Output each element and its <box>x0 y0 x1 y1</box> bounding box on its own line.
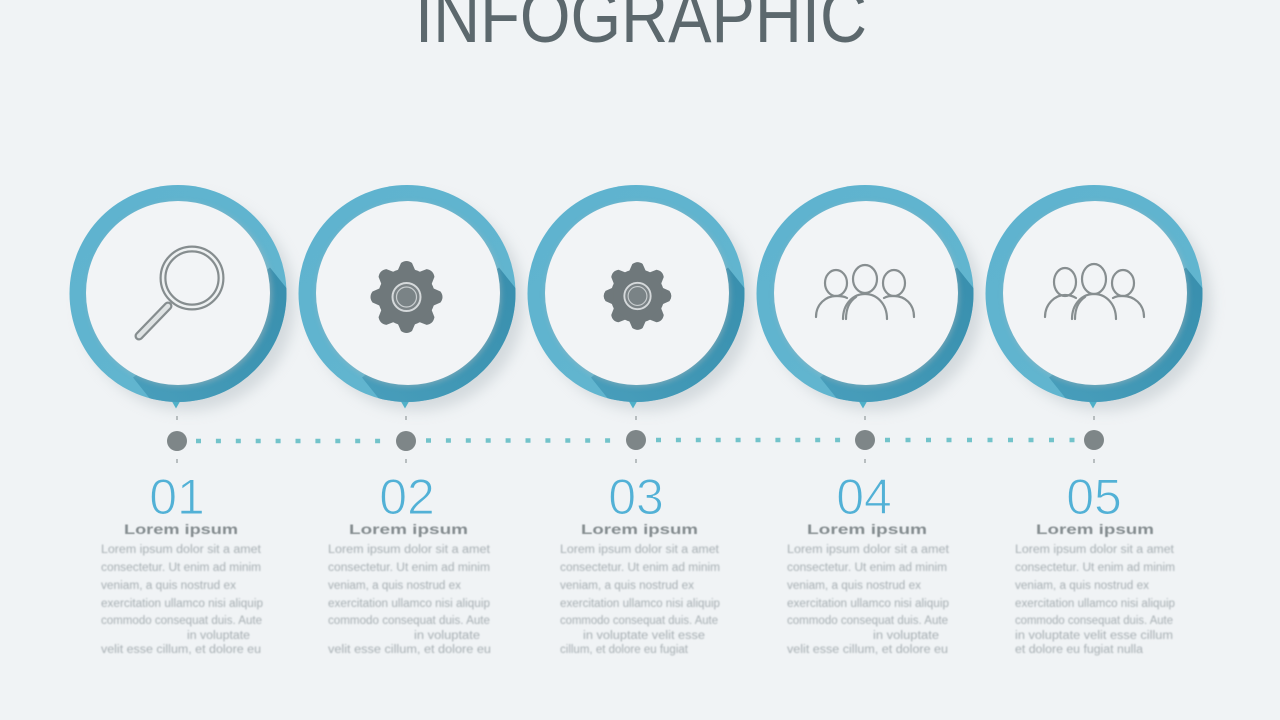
timeline node 2 <box>396 431 416 451</box>
description: consectetur. Ut enim ad minim <box>328 562 490 574</box>
description: exercitation ullamco nisi aliquip <box>1015 598 1175 610</box>
description: Lorem ipsum dolor sit a amet <box>560 544 720 556</box>
description: et dolore eu fugiat nulla <box>1015 644 1144 656</box>
step 1 text <box>101 469 263 656</box>
icon: gear <box>370 261 442 333</box>
subheading: Lorem ipsum <box>124 521 238 537</box>
step 4 badge <box>756 185 986 414</box>
description: veniam, a quis nostrud ex <box>328 580 461 592</box>
description: commodo consequat duis. Aute <box>101 615 262 627</box>
description: in voluptate velit esse cillum <box>1015 630 1173 642</box>
description <box>328 544 491 656</box>
description: Lorem ipsum dolor sit a amet <box>1015 544 1175 556</box>
description: exercitation ullamco nisi aliquip <box>787 598 949 610</box>
description: exercitation ullamco nisi aliquip <box>328 598 490 610</box>
description: veniam, a quis nostrud ex <box>101 580 236 592</box>
step 1 badge <box>70 185 299 414</box>
number 02: 02 <box>379 469 435 525</box>
description: veniam, a quis nostrud ex <box>787 580 921 592</box>
description <box>101 544 263 656</box>
description: commodo consequat duis. Aute <box>787 615 948 627</box>
description: consectetur. Ut enim ad minim <box>1015 562 1175 574</box>
number 01: 01 <box>149 469 205 525</box>
timeline <box>167 416 1104 463</box>
description: in voluptate <box>414 630 480 642</box>
description: veniam, a quis nostrud ex <box>1015 580 1149 592</box>
description: Lorem ipsum dolor sit a amet <box>787 544 950 556</box>
number 05: 05 <box>1066 469 1122 525</box>
step 5 text <box>1015 469 1175 656</box>
description: velit esse cillum, et dolore eu <box>101 644 261 656</box>
description: exercitation ullamco nisi aliquip <box>560 598 720 610</box>
icon: gear <box>604 262 671 330</box>
subheading: Lorem ipsum <box>349 521 468 537</box>
icon: group of people <box>1045 264 1144 319</box>
description: in voluptate <box>873 630 939 642</box>
icon: magnifying glass <box>139 249 221 336</box>
description: commodo consequat duis. Aute <box>1015 615 1173 627</box>
subheading: Lorem ipsum <box>807 521 927 537</box>
step 5 badge <box>986 185 1215 414</box>
description: veniam, a quis nostrud ex <box>560 580 694 592</box>
number 03: 03 <box>608 469 664 525</box>
description: commodo consequat duis. Aute <box>560 615 718 627</box>
description <box>1015 544 1175 656</box>
description: consectetur. Ut enim ad minim <box>560 562 720 574</box>
description: exercitation ullamco nisi aliquip <box>101 598 263 610</box>
number 04: 04 <box>836 469 892 525</box>
description: Lorem ipsum dolor sit a amet <box>101 544 262 556</box>
description <box>560 544 720 656</box>
subheading: Lorem ipsum <box>581 521 698 537</box>
description: Lorem ipsum dolor sit a amet <box>328 544 491 556</box>
step 3 badge <box>528 185 757 414</box>
subheading: Lorem ipsum <box>1036 521 1154 537</box>
step 4 text <box>787 469 950 656</box>
step 3 text <box>560 469 720 656</box>
description: cillum, et dolore eu fugiat <box>560 644 689 656</box>
icon: group of people <box>816 265 914 319</box>
description: velit esse cillum, et dolore eu <box>328 644 491 656</box>
description: consectetur. Ut enim ad minim <box>101 562 261 574</box>
timeline node 3 <box>626 430 646 450</box>
step 2 text <box>328 469 491 656</box>
timeline node 1 <box>167 431 187 451</box>
description: velit esse cillum, et dolore eu <box>787 644 948 656</box>
description <box>787 544 950 656</box>
step 2 badge <box>298 185 528 414</box>
description: commodo consequat duis. Aute <box>328 615 490 627</box>
timeline node 4 <box>855 430 875 450</box>
description: consectetur. Ut enim ad minim <box>787 562 947 574</box>
description: in voluptate <box>187 630 250 642</box>
description: in voluptate velit esse <box>583 630 705 642</box>
timeline node 5 <box>1084 430 1104 450</box>
